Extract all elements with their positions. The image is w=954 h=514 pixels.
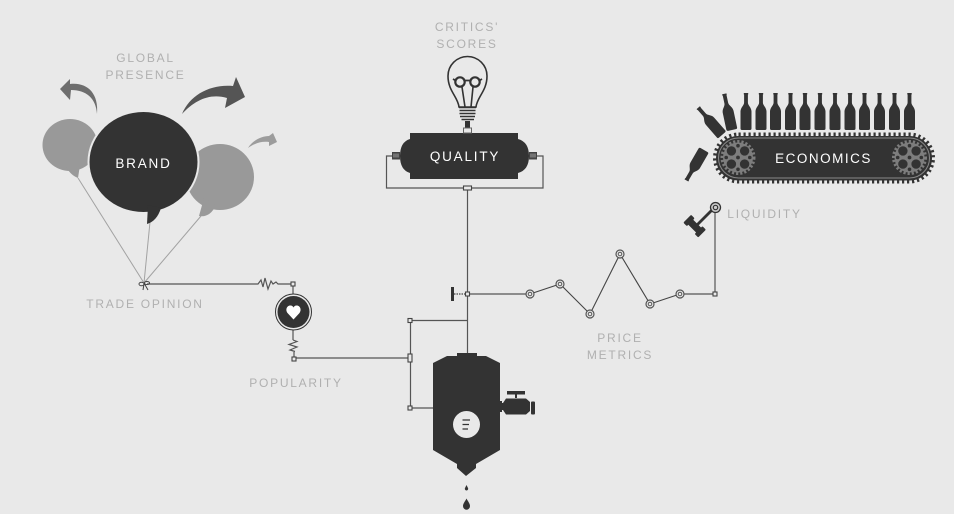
icon: connectors — [392, 152, 537, 160]
icon: valve handle — [451, 287, 470, 301]
label: critics' scores: CRITICS' — [435, 20, 499, 34]
icon: tank logo — [453, 411, 480, 438]
label: popularity: POPULARITY — [249, 376, 343, 390]
nodes — [713, 292, 717, 296]
bottles on conveyor — [682, 93, 915, 183]
panel: economics conveyor — [682, 93, 933, 183]
tank body — [433, 353, 500, 476]
machine body — [400, 133, 529, 179]
label: liquidity: LIQUIDITY — [727, 207, 802, 221]
popularity nodes — [291, 282, 412, 410]
node — [464, 186, 472, 190]
icon: heart popularity — [276, 294, 312, 330]
panel: quality — [392, 56, 537, 190]
icon: string knot — [139, 282, 150, 290]
panel: brand balloons — [42, 77, 277, 290]
label: trade opinion: TRADE OPINION — [86, 297, 204, 311]
balloon brand — [88, 110, 200, 224]
price line — [530, 254, 680, 314]
price chart — [526, 250, 717, 318]
arrow: left — [60, 79, 97, 114]
label: critics' scores: SCORES — [436, 37, 498, 51]
connector lines — [147, 156, 715, 408]
icon: gear right — [894, 142, 926, 174]
heading: brand: BRAND — [115, 156, 172, 171]
label: price metrics: METRICS — [587, 348, 653, 362]
panel: tank — [433, 353, 535, 510]
label: global presence: PRESENCE — [105, 68, 186, 82]
icon: tap — [500, 391, 535, 414]
icon: large drop — [463, 498, 470, 510]
arrow: small right — [248, 133, 277, 148]
price points — [526, 250, 684, 318]
label: global presence: GLOBAL — [116, 51, 175, 65]
balloon left — [42, 119, 98, 178]
heading: economics: ECONOMICS — [775, 151, 872, 166]
balloon right — [186, 144, 254, 216]
icon: light bulb with glasses — [448, 56, 487, 133]
icon: gavel liquidity — [683, 202, 720, 237]
balloon strings — [78, 178, 201, 283]
arrow: large right — [182, 77, 245, 114]
conveyor belt — [715, 134, 933, 182]
icon: gear left — [722, 142, 754, 174]
icon: small drop — [465, 485, 468, 490]
label: price metrics: PRICE — [597, 331, 643, 345]
heading: quality: QUALITY — [430, 149, 500, 164]
